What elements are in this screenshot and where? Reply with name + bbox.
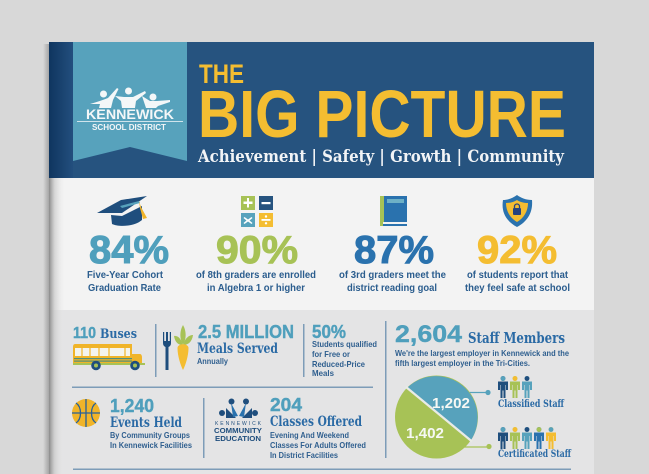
ribbon with Kennewick School District logo bbox=[73, 42, 187, 161]
fact: 204 classes bbox=[214, 395, 366, 460]
panel: staff members: We're the largest employer in Kennewick and the bbox=[395, 348, 569, 358]
pie chart: 1,202 bbox=[432, 395, 470, 412]
stat: 92% safety: they feel safe at school bbox=[465, 283, 570, 294]
fact: 50% reduced price meals: Students qualified bbox=[312, 339, 377, 349]
fact: meals served: Meals Served bbox=[197, 341, 278, 357]
fact: 1,240 events: Events Held bbox=[110, 415, 182, 431]
panel: light stats section bbox=[49, 178, 594, 310]
subtitle: Achievement | Safety | Growth | Community bbox=[197, 147, 564, 166]
fact: 110 buses: 110 bbox=[73, 325, 96, 342]
icon: school bus bbox=[73, 344, 145, 370]
panel: header banner bbox=[49, 42, 594, 178]
fact: 1,240 events: In Kennewick Facilities bbox=[110, 440, 192, 450]
classified staff: Classified Staff bbox=[498, 399, 565, 410]
fact: 110 buses bbox=[73, 325, 145, 370]
certificated staff: Certificated Staff bbox=[498, 449, 572, 460]
title: THE: THE bbox=[199, 59, 244, 89]
fact: 50% reduced price meals: for Free or bbox=[312, 349, 351, 359]
fact: 1,240 events bbox=[72, 396, 192, 450]
icon: math symbols bbox=[241, 196, 273, 227]
fact: 110 buses: Buses bbox=[100, 327, 137, 342]
ribbon with Kennewick School District logo: SCHOOL DISTRICT bbox=[92, 123, 166, 132]
pie chart bbox=[395, 376, 492, 458]
logo figures bbox=[90, 88, 170, 108]
fact: 204 classes: Classes Offered bbox=[270, 414, 362, 430]
fact: 50% reduced price meals: Meals bbox=[312, 368, 334, 378]
stat: 92% safety: 92% bbox=[477, 229, 557, 272]
fact: 1,240 events: 1,240 bbox=[110, 396, 154, 416]
logo: Kennewick Community Education bbox=[214, 398, 262, 443]
icon: basketball bbox=[72, 399, 100, 427]
ribbon with Kennewick School District logo: KENNEWICK bbox=[86, 106, 174, 122]
fact: meals served bbox=[163, 322, 294, 370]
panel: staff members bbox=[395, 321, 572, 460]
fact: 204 classes: Classes For Adults Offered bbox=[270, 440, 366, 450]
panel: staff members: Staff Members bbox=[468, 329, 565, 347]
stat: 92% safety: of students report that bbox=[467, 270, 569, 281]
stat: 84% graduation: Graduation Rate bbox=[88, 283, 161, 294]
stat: 84% graduation: 84% bbox=[89, 229, 169, 272]
classified staff bbox=[498, 376, 565, 410]
stat: 87% reading bbox=[339, 196, 446, 294]
icon: fork bbox=[163, 332, 171, 370]
fact: 50% reduced price meals: 50% bbox=[312, 322, 346, 342]
stat: 90% algebra: of 8th graders are enrolled bbox=[196, 270, 316, 281]
pie chart: 1,402 bbox=[406, 425, 444, 442]
stat: 90% algebra bbox=[196, 196, 316, 294]
fact: meals served: Annually bbox=[197, 356, 228, 366]
panel: staff members: fifth largest employer in the Tri-Cities. bbox=[395, 358, 530, 368]
fact: 204 classes: In District Facilities bbox=[270, 450, 338, 460]
stat: 92% safety bbox=[465, 195, 570, 294]
panel: staff members: 2,604 bbox=[395, 321, 463, 348]
stat: 90% algebra: in Algebra 1 or higher bbox=[207, 283, 305, 294]
stat: 87% reading: of 3rd graders meet the bbox=[339, 270, 446, 281]
panel: grey facts section bbox=[49, 310, 594, 474]
stat: 90% algebra: 90% bbox=[216, 229, 298, 272]
fact: 204 classes: 204 bbox=[270, 395, 302, 415]
title: BIG PICTURE: BIG PICTURE bbox=[198, 77, 566, 152]
fact: 1,240 events: By Community Groups bbox=[110, 430, 190, 440]
fact: 50% reduced price meals bbox=[312, 322, 377, 378]
icon: carrot bbox=[174, 325, 193, 370]
stat: 87% reading: 87% bbox=[354, 229, 434, 272]
logo: Kennewick Community Education: COMMUNITY bbox=[214, 426, 262, 435]
fact: 204 classes: Evening And Weekend bbox=[270, 430, 349, 440]
logo: Kennewick Community Education: KENNEWICK bbox=[215, 421, 262, 427]
fact: meals served: 2.5 MILLION bbox=[198, 322, 294, 342]
stat: 87% reading: district reading goal bbox=[347, 283, 437, 294]
stat: 84% graduation bbox=[87, 196, 169, 294]
icon: book bbox=[380, 196, 407, 226]
logo: Kennewick Community Education: EDUCATION bbox=[215, 434, 261, 443]
certificated staff bbox=[498, 427, 572, 460]
fact: 50% reduced price meals: Reduced-Price bbox=[312, 359, 365, 369]
stat: 84% graduation: Five-Year Cohort bbox=[87, 270, 164, 281]
icon: shield with lock bbox=[503, 195, 532, 227]
icon: graduation cap bbox=[97, 196, 147, 226]
